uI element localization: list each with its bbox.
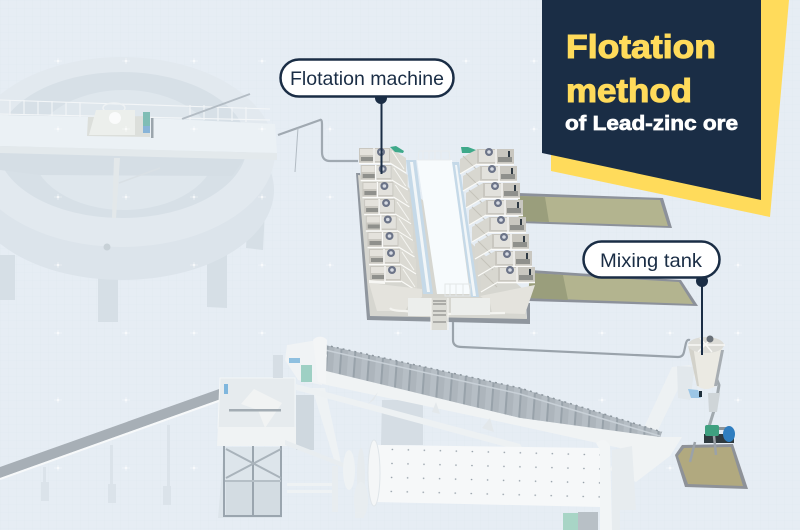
classifier trough	[322, 370, 682, 482]
title: Flotation: Flotation	[566, 28, 716, 65]
pill	[584, 242, 720, 278]
top catwalk rail	[418, 151, 450, 160]
legs	[621, 365, 697, 436]
right bank cells	[460, 148, 535, 292]
hopper and support frame	[217, 378, 296, 518]
pill label: Flotation machine	[290, 68, 444, 90]
mill drive	[612, 446, 636, 530]
sparkles	[54, 58, 742, 471]
central shaft	[112, 158, 120, 218]
thickener tank	[0, 57, 277, 322]
pill	[280, 60, 454, 96]
pill label: Mixing tank	[600, 250, 702, 272]
spiral classifier	[285, 337, 697, 482]
conveyor belt	[0, 388, 224, 478]
leader dot	[375, 92, 387, 104]
pipe support	[295, 128, 298, 172]
mill end cap	[368, 440, 380, 506]
control cabinet	[143, 112, 150, 126]
discharge valve	[104, 244, 110, 250]
center floor	[408, 298, 490, 316]
tank top	[688, 337, 724, 353]
tailing pond 2	[528, 270, 698, 306]
spiral screw	[323, 345, 662, 438]
hopper box	[218, 378, 295, 428]
collector pipes	[390, 308, 505, 314]
tank legs	[0, 210, 265, 322]
gear ring	[596, 440, 612, 530]
conveyor supports	[41, 425, 171, 505]
title: method: method	[566, 72, 692, 109]
tank inner walls	[0, 72, 247, 218]
trunnion	[343, 450, 355, 490]
mill shell	[377, 445, 600, 507]
drive platform	[87, 116, 150, 137]
flotation machine	[356, 146, 535, 330]
tank body	[0, 100, 274, 280]
bottom catwalk rail	[445, 284, 470, 296]
tailing pond 1	[518, 193, 672, 228]
bridge front edge	[0, 146, 277, 160]
access stairs	[431, 298, 448, 330]
left bank cells	[359, 148, 417, 291]
title banner	[542, 0, 789, 217]
pond pipes	[690, 436, 716, 462]
subtitle: of Lead-zinc ore	[565, 112, 738, 135]
leader line	[701, 278, 703, 355]
blue pump	[688, 389, 701, 398]
right end block	[480, 285, 535, 314]
banner navy panel	[542, 0, 761, 200]
central white basin	[417, 160, 470, 294]
ball mill	[343, 440, 636, 530]
left end block	[369, 283, 422, 311]
left blue launder	[406, 160, 433, 294]
frame members	[224, 446, 281, 516]
hopper lower band	[217, 427, 296, 446]
bridge shadow band	[0, 150, 245, 176]
pipe: flotation machine to mixing tank	[453, 322, 690, 357]
base slab	[356, 173, 530, 324]
callout: Mixing tank	[584, 242, 720, 355]
drive head	[285, 340, 327, 385]
drive units	[390, 146, 404, 153]
belt conveyor	[0, 388, 224, 505]
tank rim	[0, 57, 275, 247]
mixing tank	[675, 336, 748, 489]
overflow pipe in tank	[182, 94, 250, 119]
banner yellow backing	[551, 0, 789, 217]
conveyor head	[224, 384, 228, 394]
settling pond	[675, 444, 748, 489]
frame backing	[218, 447, 282, 518]
callout: Flotation machine	[280, 60, 454, 174]
leader dot	[696, 275, 708, 287]
right blue launder	[452, 162, 479, 297]
tank cylinder	[688, 345, 723, 389]
lower panels	[226, 482, 281, 515]
tank outlet pipe	[708, 365, 719, 430]
leader line	[380, 97, 382, 174]
classifier supports	[273, 355, 525, 518]
rail grid	[0, 100, 270, 122]
pipe: tank to flotation machine	[278, 120, 358, 161]
inlet stand	[677, 366, 695, 400]
tank inner floor	[32, 90, 216, 210]
green and blue motors	[704, 434, 734, 443]
bridge deck	[0, 115, 277, 153]
